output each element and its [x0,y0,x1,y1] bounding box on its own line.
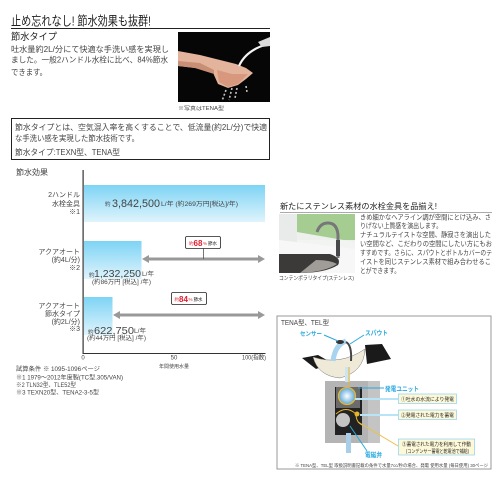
text block: water saving type: ました。一般2ハンドル水栓に比べ、84%節水 [11,54,168,64]
bar: two handle faucet: L/年 (約269万円[税込]/年) [161,200,238,208]
axes: 50 [171,356,178,362]
callout: 84% saving: % [188,297,193,302]
text block: stainless description: とができます。 [360,266,400,275]
bar: Aqua Auto: (約86万円 [税込] /年) [92,278,151,286]
heading: stainless faucets: 新たにステンレス素材の水栓金具を品揃え! [280,201,437,211]
bar chart: annual water use [38,170,266,370]
bar: Aqua Auto: L/年 [142,270,154,278]
text block: stainless description: りげない上質感を演出します。 [360,221,442,230]
label: solenoid valve: 電磁弁 [365,450,382,459]
label: generator unit: 発電ユニット [385,384,419,393]
callout: 68% saving: % [203,241,207,246]
bar: Aqua Auto: 1,232,250 [94,268,141,280]
axes [81,170,266,370]
text block: stainless description [360,212,492,275]
callout: step 3: ③蓄電された電力を利用して作動 [402,441,471,448]
arrow: 84% saving range [113,311,265,319]
bar: Aqua Auto water saving type: 節水タイプ [45,309,80,318]
footnotes: 試算条件 ※ 1095-1096ページ [16,365,100,373]
callout: 84% saving: 節水 [194,296,203,303]
chart heading: 節水効果 [16,167,48,177]
callout: 84% saving: 約 [174,296,180,303]
panel: TENA TEL diagram [277,316,491,469]
callout: 84% saving [172,292,206,304]
bar: Aqua Auto: アクアオート [38,248,80,256]
bar: two handle faucet: 3,842,500 [112,198,160,210]
heading: main title: 止め忘れなし! 節水効果も抜群! [11,14,151,28]
label: generator unit [358,384,419,393]
label: spout [350,328,388,344]
bar: Aqua Auto: 約 [89,271,95,279]
bar: two handle faucet: ※1 [69,208,80,216]
callout box: definition: 節水タイプとは、空気混入率を高くすることで、低流量(約2L/分)で快適 [15,122,267,132]
photo: hands under faucet [178,32,270,102]
photo: stainless faucet [279,214,355,273]
bar: two handle faucet: 水栓金具 [52,199,80,208]
callout: 68% saving: 約 [189,240,194,247]
photo caption: contemporary type: コンテンポラリタイプ(ステンレス) [279,274,354,282]
bar: Aqua Auto [38,241,154,286]
callout box: definition: な手洗い感を実現した節水技術です。 [15,133,139,143]
label: spout: スパウト [365,328,388,337]
label: sensor: センサー [300,331,322,338]
callout: step 3 [358,422,474,455]
bar: Aqua Auto water saving type: 約 [88,328,94,336]
panel title: TENA型、TEL型 [281,318,329,327]
diagram: basin and faucet [302,340,391,378]
footnotes: ※3 TEXN20型、TENA2-3-5型 [16,388,99,396]
bar: two handle faucet: 2ハンドル [48,192,80,199]
label: sensor [300,331,338,341]
bar: Aqua Auto: (約4L/分) [52,255,80,264]
bar: two handle faucet: 約 [105,200,111,208]
bar: two handle faucet [48,185,265,222]
photo caption: ※写真はTENA型 [178,105,224,112]
bar: Aqua Auto water saving type [38,297,146,342]
panel footnote: ※ TENA型、TEL型 取扱説明書記載の条件で水量7cc/秒の場合、発電 使用水量 (毎日使用) 30ページ [295,462,488,469]
callout: 68% saving [186,236,220,248]
callout: 68% saving: 節水 [208,240,217,247]
bar: Aqua Auto: ※2 [69,264,80,272]
axes: 100(指数) [242,354,266,362]
arrow: 68% saving range [142,247,265,263]
callout: step 1 [355,394,456,404]
footnotes: ※2 TLN32型、TLE52型 [16,381,76,389]
callout: 68% saving: 68 [194,239,203,248]
callout: step 1: ①吐水の水流により発電 [401,396,454,403]
diagram: generator unit cabinet [325,367,380,453]
callout: 84% saving: 84 [179,295,188,304]
text block: water saving type: できます。 [11,68,47,77]
callout box: definition: 節水タイプ:TEXN型、TENA型 [15,147,120,157]
text block: water saving type [11,31,169,77]
footnotes: ※1 1979～2012年度製(TC型.305/VAN) [16,374,123,382]
axes: 0 [81,356,85,362]
callout box: definition [12,118,270,160]
bar: Aqua Auto water saving type: ※3 [69,325,80,333]
bar: Aqua Auto water saving type: (約2L/分) [52,317,80,326]
bar: Aqua Auto water saving type: L/年 [134,327,146,335]
bar: Aqua Auto water saving type: アクアオート [38,302,80,310]
callout: step 2: ②発電された電力を蓄電 [401,412,454,419]
axes: 年間使用水量 [159,363,189,370]
label: solenoid valve [350,426,382,459]
callout: step 2 [360,410,456,420]
footnotes [16,365,123,396]
bar: Aqua Auto water saving type: 622,750 [94,325,134,337]
bar: Aqua Auto water saving type: (約44万円 [税込] /年) [87,334,146,342]
text block: water saving type: 節水タイプ [11,31,57,43]
text block: water saving type: 吐水量約2L/分にて快適な手洗い感を実現し [11,44,169,54]
callout: step 3: (コンデンサー蓄電と乾電池で補給) [406,448,469,455]
